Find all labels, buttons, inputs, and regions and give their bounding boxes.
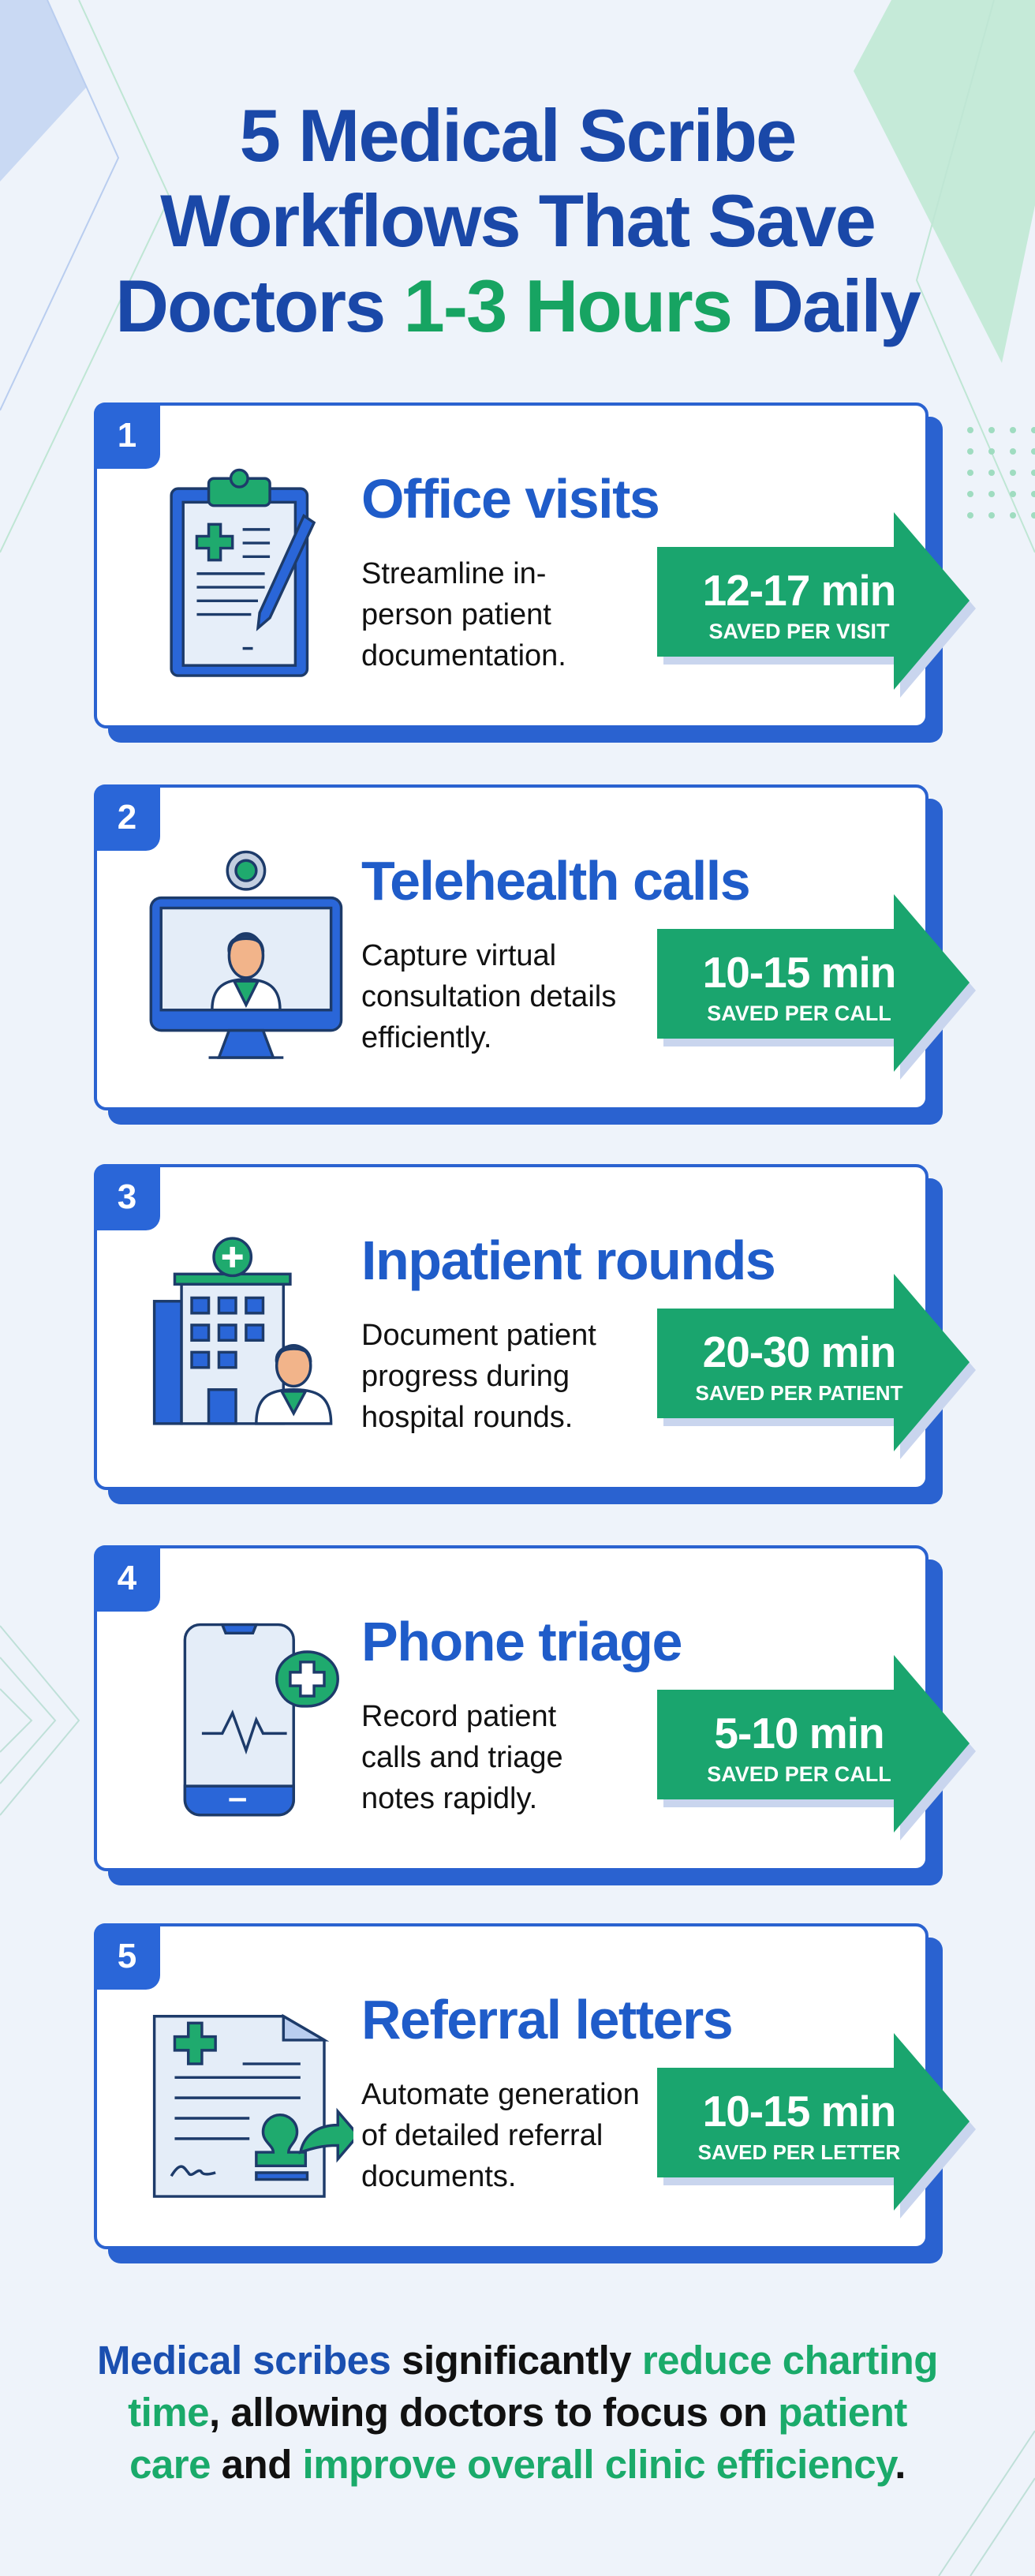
- arrow: 10-15 min: [657, 2033, 976, 2218]
- description: progress during: [361, 1360, 570, 1393]
- arrow: 20-30 min: SAVED PER PATIENT: [696, 1381, 903, 1405]
- icon: referral document: [153, 2014, 353, 2198]
- description: [361, 557, 566, 672]
- description: [361, 2078, 640, 2193]
- badge 2: 2: [118, 798, 136, 837]
- description: Record patient: [361, 1700, 556, 1733]
- arrow: 5-10 min: SAVED PER CALL: [707, 1762, 891, 1786]
- arrow: 20-30 min: 20-30 min: [703, 1327, 895, 1376]
- icon: monitor with doctor: [150, 851, 342, 1059]
- panel: office visits: [94, 402, 976, 743]
- arrow: 20-30 min: [657, 1274, 976, 1459]
- description: Streamline in-: [361, 557, 546, 590]
- title: [115, 94, 921, 347]
- description: efficiently.: [361, 1021, 491, 1054]
- badge 3: [94, 1164, 160, 1230]
- footer summary: Medical scribes significantly reduce charting: [97, 2338, 938, 2383]
- icon: hospital with doctor: [153, 1237, 333, 1425]
- icon: phone: [183, 1623, 339, 1817]
- badge 1: [94, 402, 160, 469]
- heading: Office visits: [361, 468, 659, 530]
- heading: Inpatient rounds: [361, 1230, 775, 1291]
- badge 4: [94, 1545, 160, 1612]
- heading: Phone triage: [361, 1611, 682, 1672]
- panel: referral letters: [94, 1923, 976, 2263]
- description: Automate generation: [361, 2078, 640, 2111]
- heading: Referral letters: [361, 1989, 732, 2050]
- arrow: 10-15 min: 10-15 min: [703, 2087, 895, 2136]
- panel: phone triage: [94, 1545, 976, 1885]
- arrow: 12-17 min: SAVED PER VISIT: [708, 620, 890, 643]
- title: Workflows That Save: [160, 179, 875, 262]
- arrow: 10-15 min: 10-15 min: [703, 948, 895, 997]
- panel: inpatient rounds: [94, 1164, 976, 1504]
- title: Doctors 1-3 Hours Daily: [115, 264, 920, 347]
- description: calls and triage: [361, 1741, 563, 1774]
- description: consultation details: [361, 980, 616, 1013]
- description: hospital rounds.: [361, 1401, 573, 1434]
- description: [361, 939, 616, 1054]
- badge 2: [94, 784, 160, 851]
- arrow: 10-15 min: [657, 894, 976, 1080]
- badge 3: 3: [118, 1178, 136, 1216]
- badge 5: 5: [118, 1937, 136, 1975]
- icon: clipboard: [170, 469, 316, 677]
- heading: Telehealth calls: [361, 850, 749, 912]
- badge 5: [94, 1923, 160, 1990]
- description: [361, 1319, 596, 1434]
- arrow: 10-15 min: SAVED PER LETTER: [698, 2140, 901, 2164]
- title: 5 Medical Scribe: [240, 94, 795, 177]
- panel: telehealth: [94, 784, 976, 1125]
- footer summary: care and improve overall clinic efficiency.: [129, 2442, 906, 2487]
- arrow: 12-17 min: 12-17 min: [703, 566, 895, 615]
- footer summary: time, allowing doctors to focus on patient: [128, 2390, 907, 2435]
- footer summary: [97, 2338, 938, 2487]
- badge 1: 1: [118, 416, 136, 455]
- arrow: 5-10 min: 5-10 min: [714, 1709, 884, 1758]
- description: documentation.: [361, 639, 566, 672]
- badge 4: 4: [118, 1559, 136, 1597]
- description: of detailed referral: [361, 2119, 603, 2152]
- description: [361, 1700, 563, 1815]
- arrow: 5-10 min: [657, 1655, 976, 1840]
- arrow: 12-17 min: [657, 512, 976, 698]
- description: Document patient: [361, 1319, 596, 1352]
- description: person patient: [361, 598, 551, 631]
- description: Capture virtual: [361, 939, 556, 972]
- description: notes rapidly.: [361, 1782, 537, 1815]
- description: documents.: [361, 2160, 516, 2193]
- arrow: 10-15 min: SAVED PER CALL: [707, 1002, 891, 1025]
